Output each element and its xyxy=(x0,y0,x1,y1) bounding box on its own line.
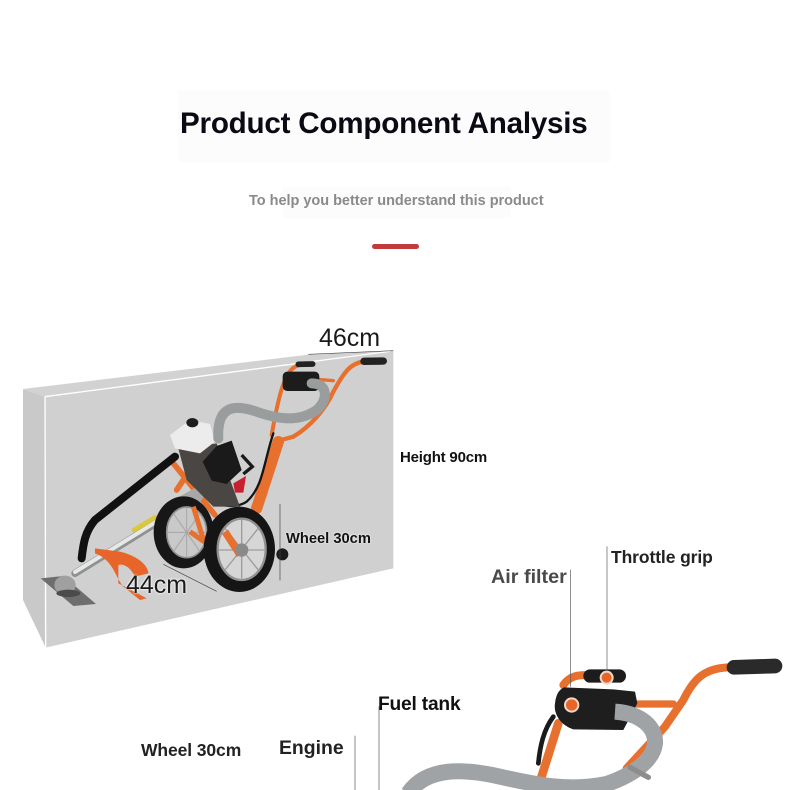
engine block xyxy=(178,443,240,507)
grey hose xyxy=(408,712,655,790)
title backdrop xyxy=(178,90,610,162)
label: air filter: Air filter xyxy=(491,566,567,588)
label: fuel tank: Fuel tank xyxy=(378,694,460,715)
handle frame xyxy=(173,362,363,542)
label: throttle grip: Throttle grip xyxy=(611,547,713,567)
box: top face xyxy=(23,351,393,397)
yellow label xyxy=(134,517,155,530)
label: engine: Engine xyxy=(279,737,344,759)
box: front face xyxy=(45,351,393,648)
subtitle backdrop xyxy=(283,187,511,218)
right handle xyxy=(627,666,775,768)
red accent bar xyxy=(372,244,419,249)
subtitle: To help you better understand this product xyxy=(249,193,544,209)
grips xyxy=(364,350,383,372)
title: Product Component Analysis xyxy=(180,107,588,140)
left handle xyxy=(538,675,619,782)
box: left face xyxy=(23,389,46,648)
orange markers xyxy=(564,671,614,713)
label: wheel 30cm on box: Wheel 30cm xyxy=(286,531,371,547)
hose clamp xyxy=(630,767,648,777)
air filter box xyxy=(203,441,242,484)
control cable xyxy=(213,433,273,506)
black arm xyxy=(82,457,175,558)
label: 44cm: 44cm xyxy=(126,571,187,599)
box edges xyxy=(45,351,390,648)
mower xyxy=(75,361,383,573)
orange guard xyxy=(95,548,148,600)
air filter housing xyxy=(555,687,637,730)
small caster xyxy=(276,548,288,560)
dimension lines xyxy=(163,351,393,591)
label: height 90cm: Height 90cm xyxy=(400,449,487,466)
label: wheel 30cm: Wheel 30cm xyxy=(141,740,241,760)
filter housing and hose xyxy=(218,372,325,438)
front wheel xyxy=(204,507,275,592)
blade xyxy=(41,576,96,606)
label: 46cm: 46cm xyxy=(319,324,380,352)
leader lines xyxy=(355,547,607,790)
shaft xyxy=(75,515,167,573)
engine tank xyxy=(170,420,215,453)
rear wheel xyxy=(154,496,214,568)
